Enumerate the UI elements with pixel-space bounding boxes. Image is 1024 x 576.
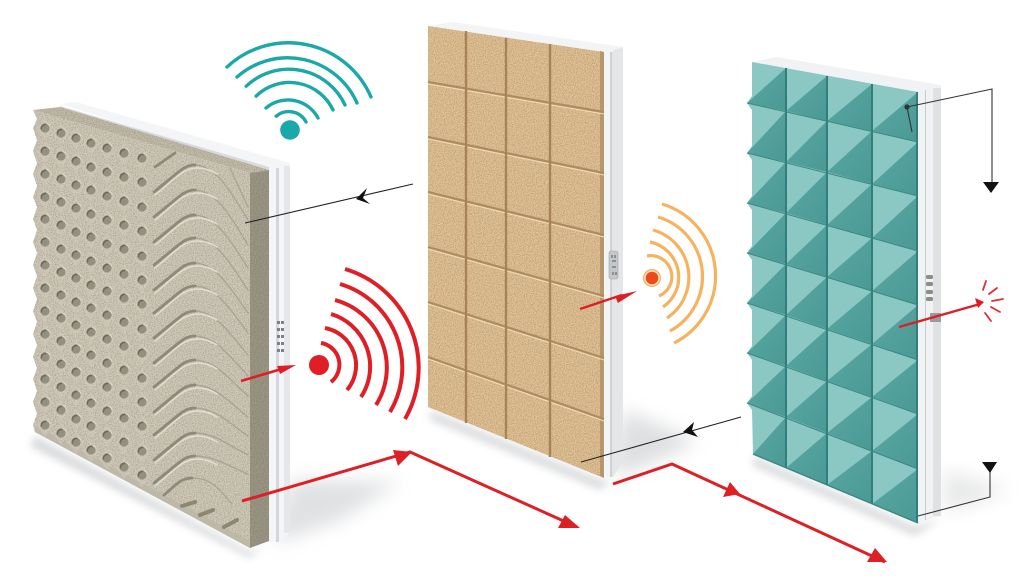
stone panel side edge [250, 170, 269, 548]
backing layers of stone panel [60, 102, 290, 543]
stone panel bottom lip [35, 426, 250, 548]
icon: teal wifi-style sound waves [227, 43, 371, 140]
tile grout lines [428, 31, 604, 457]
tan panel face [428, 26, 604, 478]
arrow: red transmission through stone panel [241, 365, 296, 381]
arrow: black leader down from teal panel [904, 89, 999, 193]
arrow: red transmission through tan panel [580, 291, 637, 309]
panel: teal pyramid panel [747, 57, 941, 523]
arrow: black leader up from teal panel base [918, 462, 997, 516]
stone panel top edge [33, 107, 269, 173]
backing layers of teal panel [752, 57, 941, 523]
stone panel front face [33, 110, 250, 548]
wavy groove relief [154, 153, 248, 504]
arrow: black leader to stone panel [245, 184, 413, 223]
tan panel right bevel [600, 51, 604, 478]
groove end marks [182, 502, 237, 527]
icon: red impact sparks [983, 281, 1003, 321]
dark pyramid facets [747, 68, 918, 523]
pyramid seam lines [747, 68, 918, 523]
vent plate on tan panel [609, 251, 618, 279]
icon: red sound waves [309, 269, 419, 419]
arrow: red reflection from tan panel [613, 464, 887, 562]
dimple relief pattern [37, 118, 150, 487]
teal panel light base face [747, 62, 918, 523]
backing layers of tan panel [428, 22, 623, 477]
panel: textured stone wall panel [33, 102, 290, 548]
panel: tan tiled panel [428, 22, 623, 478]
arrow: black leader to tan panel [581, 417, 741, 462]
vent slots on teal panel [926, 275, 933, 301]
vent slots on stone panel [277, 321, 284, 352]
arrow: red transmission through teal panel [899, 298, 984, 327]
clip on teal panel [930, 313, 941, 322]
icon: orange sound waves [643, 204, 716, 343]
floor shadows [30, 410, 1010, 558]
arrow: red reflection from stone panel [242, 450, 580, 528]
